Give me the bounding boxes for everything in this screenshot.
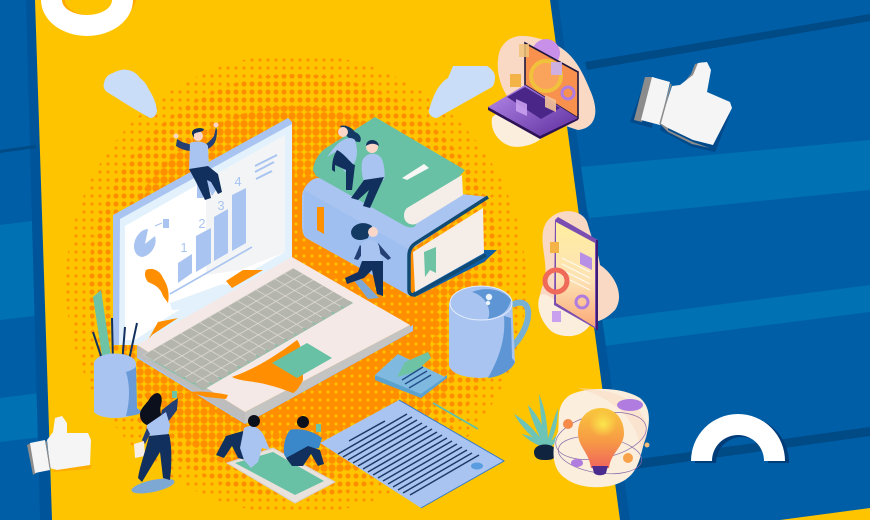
pen line — [433, 403, 478, 429]
isometric purple laptop with gears — [488, 36, 595, 147]
paper document — [320, 400, 504, 508]
icon: small thumbs up — [27, 416, 92, 475]
bar chart — [170, 174, 252, 294]
pen cup — [93, 290, 142, 418]
icon: cloud left — [104, 70, 157, 118]
stacked books — [302, 117, 497, 297]
smartphone with gears — [538, 211, 619, 336]
notepad — [375, 352, 447, 398]
tablet with two people — [216, 415, 335, 503]
person: woman with phone — [130, 391, 178, 496]
bar chart: 3 — [217, 198, 225, 213]
decorative ring top — [41, 0, 136, 36]
bar chart: 1 — [180, 240, 188, 255]
laptop — [113, 118, 413, 424]
coffee mug — [449, 286, 528, 378]
green book — [313, 117, 465, 227]
large blue book — [302, 178, 497, 297]
keyboard — [143, 268, 353, 390]
decorative half ring bottom right — [691, 414, 789, 463]
laptop base — [137, 257, 413, 424]
screen text lines — [255, 155, 277, 179]
person: woman walking — [345, 223, 391, 299]
lightbulb icon — [551, 388, 651, 487]
yellow panel — [35, 0, 620, 520]
laptop screen — [113, 118, 292, 345]
person: man sitting on book — [351, 140, 385, 208]
person sitting left — [216, 415, 270, 468]
person sitting right — [284, 416, 324, 466]
person: woman sitting on book — [327, 125, 361, 190]
trackpad — [272, 343, 332, 378]
icon: cloud right — [429, 66, 495, 118]
bar chart: 2 — [198, 216, 206, 231]
icon: large thumbs up — [630, 62, 732, 152]
pie chart — [134, 219, 169, 257]
halftone orange sunburst — [66, 54, 526, 514]
potted plant — [514, 394, 568, 460]
person: man sitting on screen — [174, 122, 222, 200]
bar chart: 4 — [234, 174, 242, 189]
